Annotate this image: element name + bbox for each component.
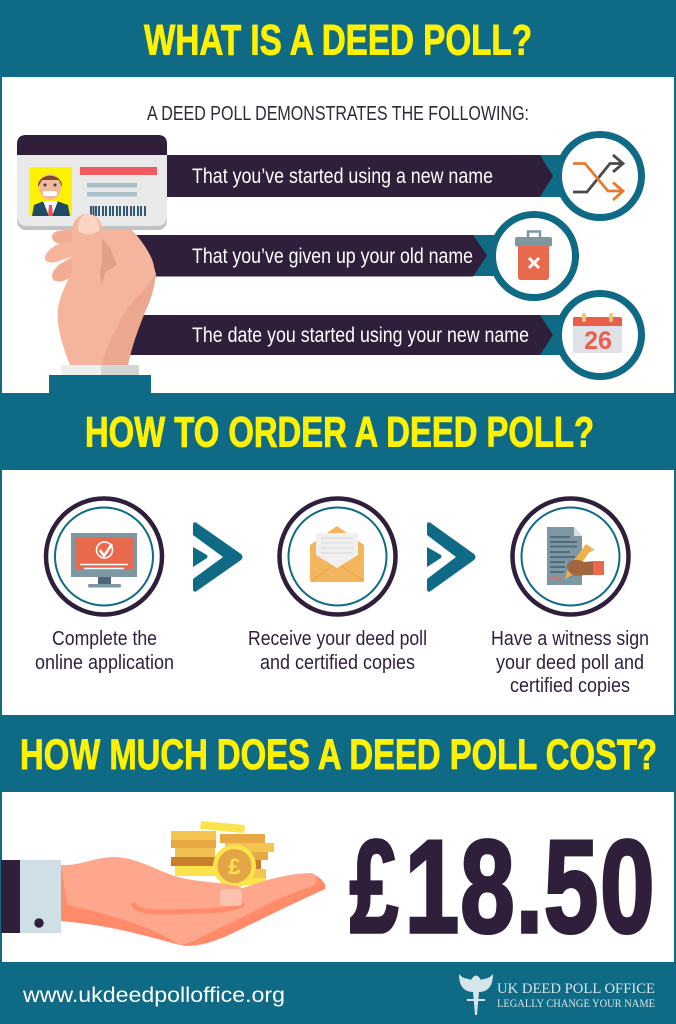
step 1: online application: online application: [35, 651, 174, 674]
website url: www.ukdeedpolloffice.org: [22, 984, 285, 1007]
panel: ordering steps: [35, 498, 649, 697]
price: £: [350, 813, 398, 960]
logo: UK DEED POLL OFFICE: [497, 981, 655, 997]
step 2: receive documents: and certified copies: [260, 651, 415, 674]
item 2: old name: That you’ve given up your old name: [192, 244, 473, 268]
item 2: old name: [130, 214, 576, 298]
item 1: new name: [160, 134, 642, 218]
fingers: [52, 229, 72, 245]
header band: cost: [0, 715, 676, 792]
hand holding ID card: [17, 135, 167, 393]
arrow: step 1 to 2: [193, 522, 242, 592]
ID card: [17, 135, 167, 230]
step 2: receive documents: [248, 498, 427, 674]
item 3: start date: [125, 294, 642, 376]
step 2: receive documents: Receive your deed poll: [248, 627, 427, 650]
item 3: start date: The date you started using your new name: [192, 323, 529, 347]
step 3: witness signature: your deed poll and: [496, 651, 644, 674]
coins: [171, 821, 274, 888]
panel: what a deed poll demonstrates: [17, 103, 642, 393]
hand holding coins: [1, 821, 325, 946]
coins: £: [228, 854, 241, 879]
item 3: start date: 26: [584, 327, 612, 355]
logo: LEGALLY CHANGE YOUR NAME: [497, 998, 655, 1010]
panel: cost: [1, 813, 654, 960]
step 1: online application: Complete the: [52, 627, 157, 650]
header band: what is a deed poll: WHAT IS A DEED POLL?: [144, 16, 532, 64]
arrow: step 2 to 3: [427, 522, 476, 592]
thumb: [72, 214, 102, 290]
footer: [0, 962, 676, 1024]
logo: [459, 974, 655, 1015]
step 3: witness signature: Have a witness sign: [491, 627, 649, 650]
step 3: witness signature: certified copies: [510, 674, 630, 697]
item 1: new name: That you’ve started using a new name: [192, 164, 493, 188]
price: 18.50: [405, 813, 654, 960]
step 1: online application: [35, 498, 174, 674]
step 3: witness signature: [491, 498, 649, 697]
header band: how to order: [0, 393, 676, 470]
header band: what is a deed poll: [0, 0, 676, 77]
intro text: A DEED POLL DEMONSTRATES THE FOLLOWING:: [147, 103, 529, 125]
